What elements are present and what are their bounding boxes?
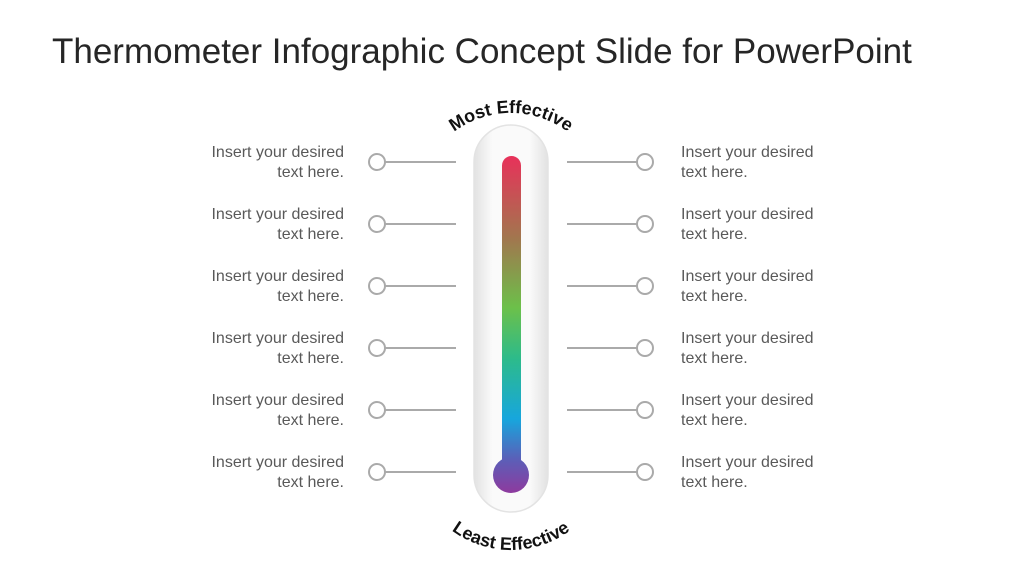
right text 2: Insert your desired — [681, 206, 814, 223]
left text 6: Insert your desired — [211, 454, 344, 471]
left text 2: Insert your desired — [211, 206, 344, 223]
right text 2 — [681, 206, 814, 243]
label: least effective: Least Effective — [452, 520, 569, 550]
left text 5 — [211, 392, 344, 429]
left text 2 — [211, 206, 344, 243]
right text 1: text here. — [681, 164, 748, 181]
left text 2: text here. — [277, 226, 344, 243]
right text 4 — [681, 330, 814, 367]
right text 5: text here. — [681, 412, 748, 429]
connectors — [369, 154, 653, 480]
right text 4: text here. — [681, 350, 748, 367]
title: Thermometer Infographic Concept Slide for PowerPoint — [52, 32, 912, 71]
right text 3: Insert your desired — [681, 268, 814, 285]
left text 1: Insert your desired — [211, 144, 344, 161]
right text 1 — [681, 144, 814, 181]
tube — [474, 125, 548, 512]
left text 5: text here. — [277, 412, 344, 429]
left text 3 — [211, 268, 344, 305]
left text 3: Insert your desired — [211, 268, 344, 285]
left text 1: text here. — [277, 164, 344, 181]
label: most effective: Most Effective — [448, 100, 572, 132]
right text 5 — [681, 392, 814, 429]
right text 2: text here. — [681, 226, 748, 243]
right text 6: Insert your desired — [681, 454, 814, 471]
left text 4: Insert your desired — [211, 330, 344, 347]
mercury column — [493, 156, 529, 493]
left text 6: text here. — [277, 474, 344, 491]
left text 5: Insert your desired — [211, 392, 344, 409]
left text 1 — [211, 144, 344, 181]
right text 3 — [681, 268, 814, 305]
left text 4 — [211, 330, 344, 367]
left text 4: text here. — [277, 350, 344, 367]
left text 3: text here. — [277, 288, 344, 305]
right text 6 — [681, 454, 814, 491]
right text 4: Insert your desired — [681, 330, 814, 347]
right text 3: text here. — [681, 288, 748, 305]
right text 5: Insert your desired — [681, 392, 814, 409]
left text 6 — [211, 454, 344, 491]
right text 1: Insert your desired — [681, 144, 814, 161]
right text 6: text here. — [681, 474, 748, 491]
